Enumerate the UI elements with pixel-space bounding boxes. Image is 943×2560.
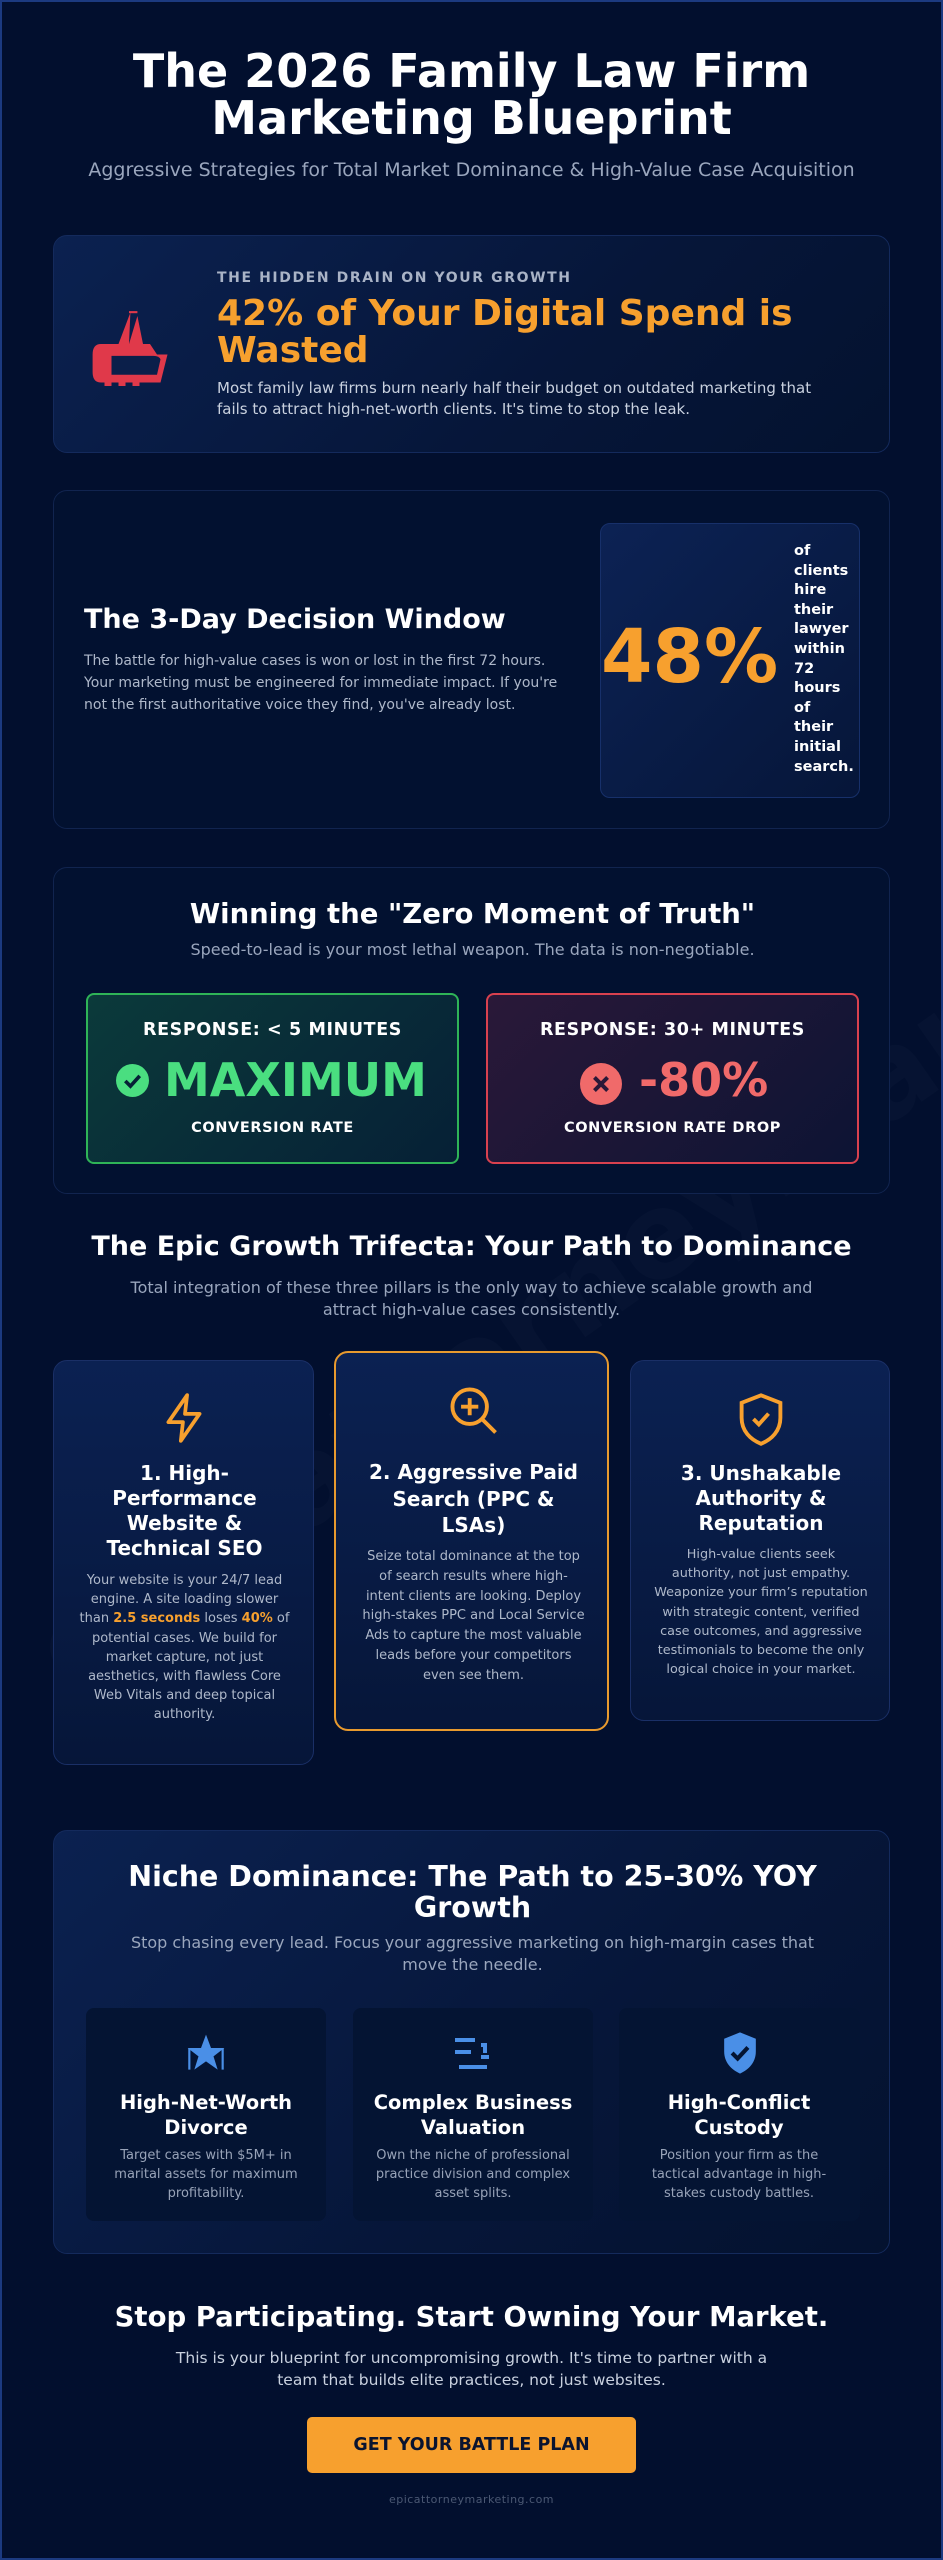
stat number: 48% [601, 614, 778, 700]
icon: magnifier [450, 1388, 497, 1434]
label: THE HIDDEN DRAIN ON YOUR GROWTH [217, 270, 572, 286]
button: GET YOUR BATTLE PLAN [353, 2435, 590, 2455]
card body: Weaponize your firm’s reputation [654, 1585, 868, 1600]
subtitle: Stop chasing every lead. Focus your aggressive marketing on high-margin cases that move the needle. [131, 1933, 814, 1974]
card title: 2. Aggressive Paid Search (PPC & LSAs) [369, 1460, 578, 1537]
subtitle: Speed-to-lead is your most lethal weapon. The data is non-negotiable. [190, 940, 755, 959]
green box: CONVERSION RATE [191, 1120, 354, 1136]
trifecta heading: The Epic Growth Trifecta: Your Path to Dominance [91, 1231, 852, 1262]
card body: with strategic content, verified [662, 1605, 860, 1620]
title: Marketing Blueprint [211, 91, 732, 145]
icon: x [580, 1063, 622, 1105]
card: paid search [334, 1351, 609, 1731]
red box [486, 993, 859, 1164]
card body: authority, not just empathy. [672, 1566, 850, 1581]
stat caption: of clients hire their lawyer within 72 hours of their initial search. [794, 543, 854, 775]
card title: 3. Unshakable Authority & Reputation [681, 1461, 841, 1535]
body: Most family law firms burn nearly half their budget on outdated marketing that fails to attract high-net-worth clients. It's time to stop the leak. [217, 379, 811, 418]
card body: Seize total dominance at the top of search results where high-intent clients are looking. Deploy high-stakes PPC and Local Service Ads to capture the most valuable leads before your competitors even see them. [362, 1549, 585, 1683]
red box: CONVERSION RATE DROP [564, 1120, 781, 1136]
red box: -80% [639, 1053, 768, 1107]
heading: Niche Dominance: The Path to 25-30% YOY Growth [128, 1860, 817, 1924]
CTA heading: Stop Participating. Start Owning Your Market. [115, 2301, 828, 2333]
button [307, 2417, 636, 2473]
sub card: HNW divorce [86, 2008, 326, 2221]
panel: zero moment of truth [53, 867, 890, 1194]
sub card: business valuation: Own the niche of professional practice division and complex asset splits. [376, 2148, 570, 2201]
card body [654, 1547, 868, 1677]
sub card: custody: High-Conflict Custody [668, 2091, 810, 2139]
icon: list [455, 2038, 489, 2069]
red box: RESPONSE: 30+ MINUTES [540, 1020, 805, 1040]
card: website & SEO [53, 1360, 314, 1765]
title: The 2026 Family Law Firm [133, 44, 810, 98]
subtitle: Aggressive Strategies for Total Market Dominance & High-Value Case Acquisition [88, 159, 855, 181]
body: The battle for high-value cases is won or lost in the first 72 hours. Your marketing must be engineered for immediate impact. If you're not the first authoritative voice they find, you've already lost. [84, 653, 557, 713]
card title: 1. High-Performance Website & Technical SEO [106, 1461, 262, 1560]
icon: shield [740, 1393, 782, 1446]
stat box: 48% [600, 523, 860, 798]
icon: lightning [166, 1393, 202, 1443]
icon: red ship [92, 311, 168, 386]
panel: 3-day decision window [53, 490, 890, 829]
headline: 42% of Your Digital Spend is Wasted [217, 293, 793, 371]
sub card: custody [619, 2008, 860, 2221]
sub card: business valuation: Complex Business Valuation [374, 2091, 572, 2139]
card body: testimonials to become the only [658, 1643, 864, 1658]
heading: Winning the "Zero Moment of Truth" [190, 898, 755, 930]
icon: check [116, 1064, 149, 1097]
card body: case outcomes, and aggressive [660, 1624, 862, 1639]
card body: High-value clients seek [687, 1547, 835, 1562]
sub card: HNW divorce: Target cases with $5M+ in marital assets for maximum profitability. [114, 2148, 298, 2201]
card body: logical choice in your market. [666, 1662, 856, 1677]
sub card: business valuation [353, 2008, 593, 2221]
green box [86, 993, 459, 1164]
CTA body: This is your blueprint for uncompromising growth. It's time to partner with a team that builds elite practices, not just websites. [176, 2349, 767, 2389]
sub card: custody: Position your firm as the tactical advantage in high-stakes custody battles. [652, 2148, 826, 2201]
heading: The 3-Day Decision Window [84, 604, 506, 635]
green box: MAXIMUM [164, 1053, 427, 1107]
card body: Your website is your 24/7 lead engine. A site loading slower than 2.5 seconds loses 40% of potential cases. We build for market capture, not just aesthetics, with flawless Core Web Vitals and deep topical authority. [80, 1573, 289, 1722]
sub card: HNW divorce: High-Net-Worth Divorce [120, 2091, 292, 2139]
green box: RESPONSE: < 5 MINUTES [143, 1020, 402, 1040]
card: authority [630, 1360, 890, 1721]
icon: check shield [724, 2032, 756, 2074]
trifecta subtitle: Total integration of these three pillars is the only way to achieve scalable growth and attract high-value cases consistently. [131, 1278, 812, 1319]
footer: epicattorneymarketing.com [389, 2493, 554, 2506]
icon: star [188, 2034, 224, 2070]
title [133, 44, 810, 145]
panel: niche dominance [53, 1830, 890, 2254]
panel: hidden drain [53, 235, 890, 453]
